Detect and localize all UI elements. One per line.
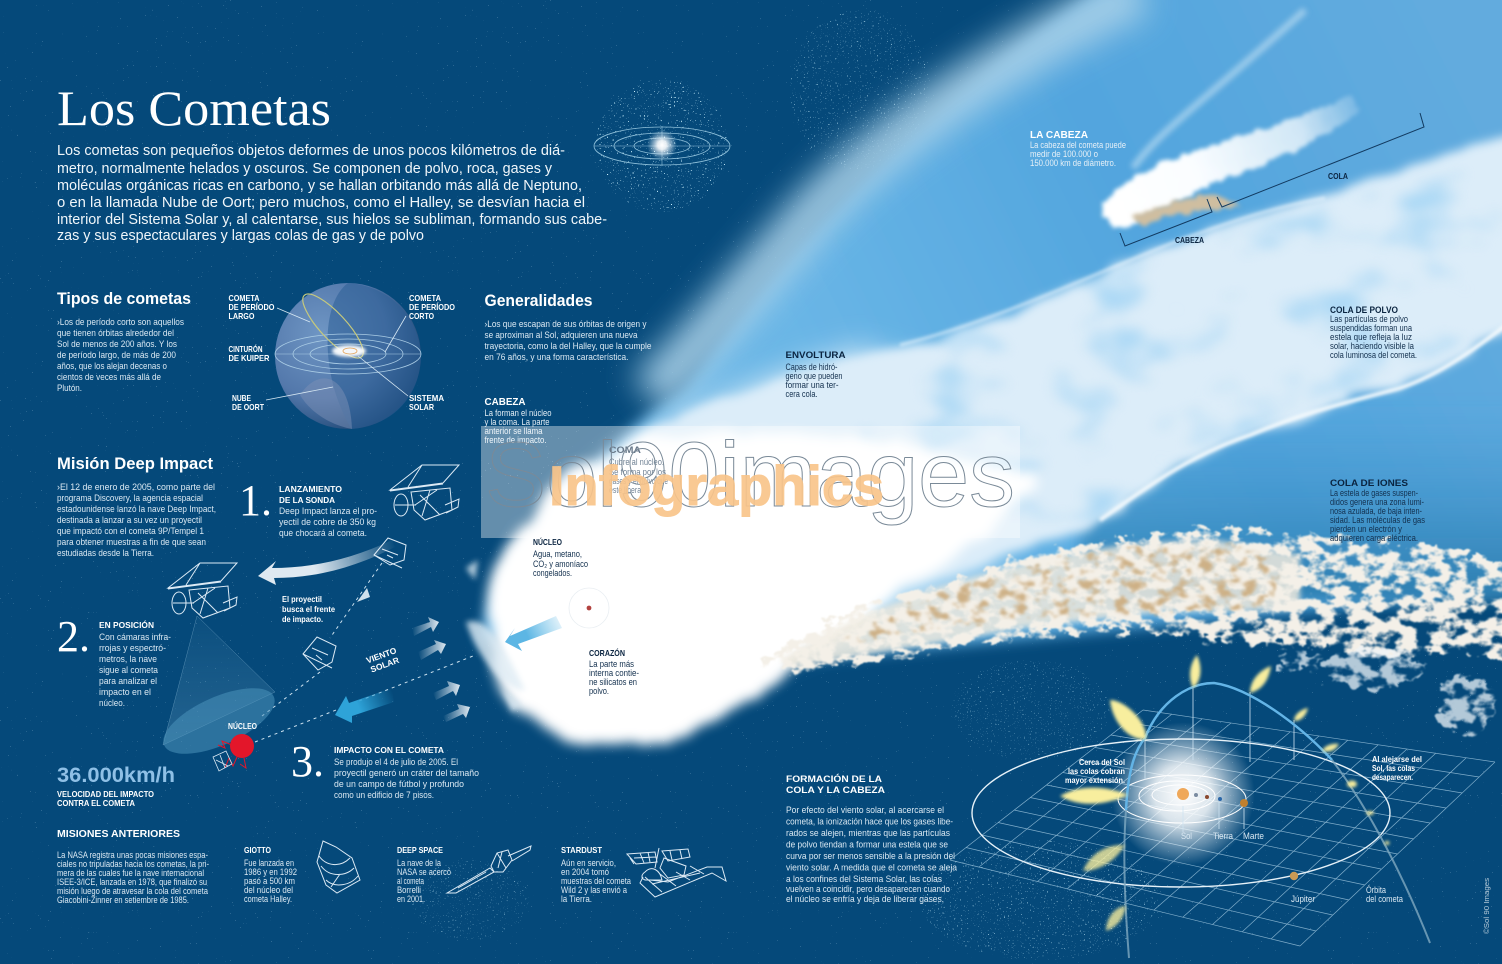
text: stardust: en 2004 tomó xyxy=(561,867,609,877)
text: misiones anteriores: MISIONES ANTERIORES xyxy=(57,828,180,840)
step 1 number: 1. xyxy=(239,476,272,525)
labels: orbit sphere: SOLAR xyxy=(409,402,434,412)
text: formación de la cola: vuelven a coincidir, pero desaparecen cuando xyxy=(786,884,950,895)
text: step 2: Con cámaras infra- xyxy=(99,632,171,643)
text: misión xyxy=(57,482,216,559)
text: cola de iones xyxy=(1330,478,1425,543)
icon: Deep Space probe xyxy=(447,846,531,893)
label: viento solar xyxy=(365,645,402,675)
text: step 2: EN POSICIÓN xyxy=(99,619,154,630)
text: generalidades: ›Los que escapan de sus órbitas de origen y xyxy=(484,319,647,330)
intro paragraph: moléculas orgánicas ricas en carbono, y se hallan orbitando más allá de Neptuno, xyxy=(57,177,582,194)
labels: orbit sphere: NUBE xyxy=(232,393,251,403)
text: misión: ›El 12 de enero de 2005, como parte del xyxy=(57,482,215,493)
text: cola de polvo: estela que refleja la luz xyxy=(1330,332,1412,342)
text: cola de polvo: suspendidas forman una xyxy=(1330,323,1412,333)
text: la cabeza xyxy=(1030,130,1126,168)
text: cabeza: y la coma. La parte xyxy=(484,417,550,427)
text: generalidades: en 76 años, y una forma característica. xyxy=(484,352,628,363)
credit: ©Sol 90 Images xyxy=(1483,877,1491,934)
diagram labels: Órbita xyxy=(1366,885,1387,896)
diagram labels: Sol, las colas xyxy=(1372,763,1415,773)
text: corazón: La parte más xyxy=(589,659,634,669)
pale main tail band xyxy=(620,130,1502,600)
comet head and coma xyxy=(486,430,1040,748)
dust tail, haze under cloud xyxy=(780,540,1300,668)
diagram labels: Júpiter xyxy=(1291,894,1315,905)
text: step 2 xyxy=(99,619,171,709)
diagram labels: Cerca del Sol xyxy=(1079,757,1125,767)
label: viento solar: SOLAR xyxy=(369,655,400,674)
text: misiones anteriores: ciales no tripuladas hacia los cometas, la pri- xyxy=(57,859,209,869)
text: giotto: del núcleo del xyxy=(244,885,293,895)
text: cola de iones: adquieren carga eléctrica. xyxy=(1330,533,1418,543)
text: formación de la cola: FORMACIÓN DE LA xyxy=(786,773,882,785)
text: tipos de cometas: Sol de menos de 200 años. Y los xyxy=(57,339,177,350)
text: giotto: pasó a 500 km xyxy=(244,876,295,886)
labels: orbit sphere: COMETA xyxy=(228,293,260,303)
stat: impact speed: 36.000km/h xyxy=(57,764,175,787)
text: cola de iones: nosa azulada, de baja inten- xyxy=(1330,506,1422,516)
text: cola de polvo: solar, haciendo visible la xyxy=(1330,341,1414,351)
stat: impact speed xyxy=(57,764,175,808)
text: misión: estadounidense lanzó la nave Deep Impact, xyxy=(57,504,216,515)
text: giotto: 1986 y en 1992 xyxy=(244,867,297,877)
label: cola: COLA xyxy=(1328,172,1348,181)
mini comet diagram xyxy=(1103,10,1424,246)
intro paragraph xyxy=(57,142,607,244)
dust tail, white cloud xyxy=(760,530,1502,672)
bracket: cabeza xyxy=(1120,199,1212,246)
mini comet body xyxy=(1103,96,1360,227)
label: viento solar: VIENTO xyxy=(365,645,398,665)
text: deep space: al cometa xyxy=(397,876,424,886)
text: formación de la cola: de polvo tiendan a formar una estela que se xyxy=(786,840,948,850)
text: envoltura xyxy=(786,350,846,399)
text: stardust xyxy=(561,845,631,904)
text: tipos de cometas: que tienen órbitas alrededor del xyxy=(57,328,174,339)
text: misión: programa Discovery, la agencia espacial xyxy=(57,493,203,504)
diagram labels: Sol xyxy=(1181,831,1192,842)
text: misión: para obtener muestras a fin de que sean xyxy=(57,537,206,548)
text: cola de iones: pierden un electrón y xyxy=(1330,524,1402,534)
text: tipos de cometas: Plutón. xyxy=(57,383,82,394)
text: step 2: impacto en el xyxy=(99,687,151,698)
text: núcleo: NÚCLEO xyxy=(533,536,562,547)
haze around head xyxy=(530,350,1000,720)
diagram labels: Tierra xyxy=(1213,831,1234,842)
icon: Stardust probe xyxy=(627,848,726,897)
text: corazón: ne silicatos en xyxy=(589,677,637,687)
text: coma: COMA xyxy=(609,445,641,456)
head wisps xyxy=(466,560,525,712)
text: tipos de cometas xyxy=(57,317,184,394)
intro paragraph: Los cometas son pequeños objetos deformes de unos pocos kilómetros de diá- xyxy=(57,142,565,159)
text: misión: estudiadas desde la Tierra. xyxy=(57,548,154,559)
text: la cabeza: medir de 100.000 o xyxy=(1030,149,1098,159)
text: step 3: IMPACTO CON EL COMETA xyxy=(334,745,444,755)
text: step 2: sigue al cometa xyxy=(99,665,159,676)
text: coma: Se forma por los xyxy=(609,467,666,477)
mini comet dust xyxy=(1132,196,1240,226)
text: giotto xyxy=(244,845,297,904)
perspective grid xyxy=(950,710,1495,946)
text: generalidades: se aproximan al Sol, adquieren una nueva xyxy=(484,330,638,341)
text: cabeza: frente de impacto. xyxy=(484,435,546,445)
arrow: white separation arrow xyxy=(258,540,395,585)
text: proyectil: busca el frente xyxy=(282,604,335,614)
icon: Oort cloud sphere xyxy=(594,80,730,212)
text: step 2: metros, la nave xyxy=(99,654,157,665)
text: misión: destinada a lanzar a su vez un proyectil xyxy=(57,515,202,526)
labels: orbit sphere xyxy=(228,293,455,412)
text: step 2: núcleo. xyxy=(99,698,125,709)
labels: orbit sphere: LARGO xyxy=(228,311,255,321)
diagram labels: mayor extensión. xyxy=(1065,775,1125,785)
text: step 1 xyxy=(279,484,377,539)
label: cabeza: CABEZA xyxy=(1175,236,1204,245)
text: misiones anteriores: misión luego de atravesar la cola del cometa xyxy=(57,886,208,896)
text: coma xyxy=(609,445,668,495)
text: step 2: para analizar el xyxy=(99,676,157,687)
text: formación de la cola: COLA Y LA CABEZA xyxy=(786,785,885,796)
text: cola de polvo: Las partículas de polvo xyxy=(1330,314,1408,324)
diagram labels xyxy=(1065,754,1422,905)
text: stardust: Aún en servicio, xyxy=(561,858,616,868)
inner orbits xyxy=(1118,775,1246,823)
text: núcleo: congelados. xyxy=(533,568,572,578)
text: proyectil xyxy=(282,594,335,624)
intro paragraph: metro, normalmente helados y oscuros. Se componen de polvo, roca, gases y xyxy=(57,160,552,177)
intro paragraph: o en la llamada Nube de Oort; pero muchos, como el Halley, se desvían hacia el xyxy=(57,194,585,211)
Jupiter orbit xyxy=(972,739,1390,887)
diagram labels: las colas cobran xyxy=(1068,766,1125,776)
text: tipos de cometas: ›Los de período corto son aquellos xyxy=(57,317,184,328)
text: formación de la cola: curva por ser menos sensible a la presión del xyxy=(786,851,955,862)
comet tails xyxy=(1060,655,1390,931)
text: cola de polvo: COLA DE POLVO xyxy=(1330,305,1398,316)
text: cola de polvo: cola luminosa del cometa. xyxy=(1330,350,1417,360)
text: misiones anteriores: mera de las cuales fue la nave internacional xyxy=(57,868,204,878)
text: misiones anteriores: Giacobini-Zinner en setiembre de 1985. xyxy=(57,895,189,905)
diagram: orbit sphere xyxy=(266,283,421,429)
text: step 1: LANZAMIENTO xyxy=(279,484,342,494)
text: formación de la cola: cometa, la ionización hace que los gases libe- xyxy=(786,816,953,828)
label: núcleo: NÚCLEO xyxy=(228,720,257,731)
labels: orbit sphere: COMETA xyxy=(409,293,441,303)
text: deep space: DEEP SPACE xyxy=(397,845,443,855)
icon: red nucleus and impact xyxy=(213,734,254,771)
text: corazón xyxy=(589,647,639,696)
text: misiones anteriores: ISEE-3/ICE, lanzada en 1978, que finalizó su xyxy=(57,877,207,887)
text: formación de la cola: viento solar. A medida que el cometa se aleja xyxy=(786,862,958,874)
bracket: cola xyxy=(1217,113,1424,207)
text: step 3: Se produjo el 4 de julio de 2005. El xyxy=(334,757,458,768)
text: cabeza: anterior se llama xyxy=(484,426,542,436)
text: tipos de cometas: años, que los alejan decenas o xyxy=(57,361,167,372)
text: envoltura: ENVOLTURA xyxy=(786,350,846,361)
instrument cone xyxy=(154,616,284,767)
triangle marker xyxy=(357,588,370,602)
text: deep space: La nave de la xyxy=(397,858,441,868)
watermark: Infographics xyxy=(549,454,884,517)
text: giotto: GIOTTO xyxy=(244,845,271,855)
step 3 number: 3. xyxy=(291,737,324,786)
text: envoltura: formar una ter- xyxy=(786,380,838,390)
text: envoltura: cera cola. xyxy=(786,389,818,399)
dust tail, tan patches xyxy=(840,543,1281,641)
text: cabeza: La forman el núcleo xyxy=(484,408,552,418)
text: deep space xyxy=(397,845,451,904)
icon: impactor probe lower xyxy=(303,637,336,670)
text: corazón: polvo. xyxy=(589,686,609,696)
labels: orbit sphere: CORTO xyxy=(409,311,434,321)
lower sky shading xyxy=(1080,400,1502,600)
text: proyectil: de impacto. xyxy=(282,614,323,624)
comet orbit xyxy=(1126,683,1332,810)
text: cola de iones: La estela de gases suspen- xyxy=(1330,488,1418,498)
planet leaders xyxy=(1145,687,1294,832)
text: la cabeza: 150.000 km de diámetro. xyxy=(1030,158,1116,168)
text: formación de la cola: el núcleo se enfría y deja de liberar gases. xyxy=(786,894,944,905)
comet envelope xyxy=(480,0,1502,660)
text: núcleo xyxy=(533,536,588,578)
icon: Giotto probe xyxy=(317,841,360,893)
text: formación de la cola xyxy=(786,773,958,905)
comet illustration: coma, envelope and tails xyxy=(466,0,1502,748)
text: misiones anteriores xyxy=(57,828,209,905)
text: corazón: CORAZÓN xyxy=(589,647,625,658)
text: proyectil: El proyectil xyxy=(282,594,322,604)
stat: impact speed: VELOCIDAD DEL IMPACTO xyxy=(57,789,154,799)
labels: orbit sphere: DE PERÍODO xyxy=(228,302,275,312)
diagram labels: Marte xyxy=(1243,831,1264,842)
labels: orbit sphere: SISTEMA xyxy=(409,393,444,403)
bright streaks along tail edges xyxy=(900,198,1502,520)
text: misión: que impactó con el cometa 9P/Tempel 1 xyxy=(57,526,204,537)
diagram: solar system and comet orbit xyxy=(950,655,1495,958)
text: cola de polvo xyxy=(1330,305,1417,360)
text: la cabeza: LA CABEZA xyxy=(1030,130,1088,141)
text: tipos de cometas: de período largo, de más de 200 xyxy=(57,350,176,361)
diagram labels: del cometa xyxy=(1366,894,1404,905)
text: formación de la cola: a los confines del Sistema Solar, las colas xyxy=(786,874,942,885)
text: step 1: yectil de cobre de 350 kg xyxy=(279,517,376,528)
text: stardust: STARDUST xyxy=(561,845,603,855)
text: cola de iones: sidad. Las moléculas de gas xyxy=(1330,515,1425,525)
text: deep space: en 2001. xyxy=(397,894,425,904)
text: núcleo: Agua, metano, xyxy=(533,549,582,559)
heading: Misión Deep Impact: Misión Deep Impact xyxy=(57,454,213,473)
text: step 3: proyectil generó un cráter del tamaño xyxy=(334,768,479,779)
text: corazón: interna contie- xyxy=(589,668,639,678)
text: tipos de cometas: cientos de veces más allá de xyxy=(57,372,161,383)
labels: orbit sphere: DE KUIPER xyxy=(228,353,270,363)
text: la cabeza: La cabeza del cometa puede xyxy=(1030,140,1126,150)
text: generalidades: trayectoria, como la del Halley, que la cumple xyxy=(484,341,652,352)
icon: Deep Impact spacecraft launch xyxy=(390,465,459,520)
text: step 1: Deep Impact lanza el pro- xyxy=(279,506,377,517)
text: cola de iones: COLA DE IONES xyxy=(1330,478,1408,489)
heading: Tipos de cometas: Tipos de cometas xyxy=(57,289,191,308)
text: step 3: como un edificio de 7 pisos. xyxy=(334,790,434,801)
text: envoltura: geno que pueden xyxy=(786,371,842,381)
arrows: solar wind xyxy=(412,617,470,722)
step 2 number: 2. xyxy=(57,612,90,661)
icon: comet heart xyxy=(569,588,609,628)
mini comet streak xyxy=(1133,10,1305,168)
envelope rim xyxy=(650,0,1140,395)
sun glow xyxy=(1111,722,1255,866)
text: cola de iones: didos genera una zona lumi- xyxy=(1330,497,1424,507)
intro paragraph: interior del Sistema Solar y, al calentarse, sus hielos se subliman, formando sus cabe- xyxy=(57,211,607,228)
diagram labels: desaparecen. xyxy=(1372,772,1413,782)
text: stardust: muestras del cometa xyxy=(561,876,631,886)
labels: orbit sphere: CINTURÓN xyxy=(228,343,262,354)
text: deep space: NASA se acercó xyxy=(397,867,451,877)
text: step 2: rrojas y espectró- xyxy=(99,643,166,654)
text: formación de la cola: Por efecto del viento solar, al acercarse el xyxy=(786,805,944,816)
text: step 3 xyxy=(334,745,479,801)
intro paragraph: zas y sus espectaculares y largas colas de gas y de polvo xyxy=(57,227,424,244)
text: núcleo: CO₂ y amoníaco xyxy=(533,559,588,569)
text: stardust: la Tierra. xyxy=(561,894,592,904)
text: giotto: cometa Halley. xyxy=(244,894,292,904)
text: cabeza: CABEZA xyxy=(484,396,526,408)
heading: Generalidades: Generalidades xyxy=(484,291,592,310)
text: step 1: DE LA SONDA xyxy=(279,495,335,505)
text: misiones anteriores: La NASA registra unas pocas misiones espa- xyxy=(57,850,208,860)
icon: spacecraft in position xyxy=(168,563,237,618)
icon: impactor probe upper xyxy=(374,538,406,568)
mottling of main tail xyxy=(860,150,1502,520)
dotted trajectory xyxy=(255,563,473,742)
text: step 1: que chocará al cometa. xyxy=(279,528,367,539)
arrow: cyan impact arrow xyxy=(335,688,394,723)
stat: impact speed: CONTRA EL COMETA xyxy=(57,798,135,808)
title: Los Cometas xyxy=(57,80,331,136)
arrow: solar wind on nucleus xyxy=(505,616,562,651)
text: coma: Cubre al núcleo. xyxy=(609,457,664,467)
text: formación de la cola: rados se alejen, mientras que las partículas xyxy=(786,828,950,839)
text: envoltura: Capas de hidró- xyxy=(786,362,838,372)
watermark: Sol90images xyxy=(485,424,1015,526)
text: coma: gases y el polvo que xyxy=(609,476,668,486)
planets xyxy=(1177,788,1298,880)
text: giotto: Fue lanzada en xyxy=(244,858,294,868)
diagram labels: Al alejarse del xyxy=(1372,754,1422,764)
text: step 3: de un campo de fútbol y profundo xyxy=(334,779,464,790)
text: deep space: Borrelli xyxy=(397,885,421,895)
text: generalidades xyxy=(484,319,652,363)
text: cabeza xyxy=(484,396,552,445)
text: stardust: Wild 2 y las envió a xyxy=(561,885,627,895)
text: coma: este libera. xyxy=(609,485,643,495)
labels: orbit sphere: DE OORT xyxy=(232,402,265,412)
labels: orbit sphere: DE PERÍODO xyxy=(409,302,455,312)
lower right clouds xyxy=(1278,648,1496,733)
